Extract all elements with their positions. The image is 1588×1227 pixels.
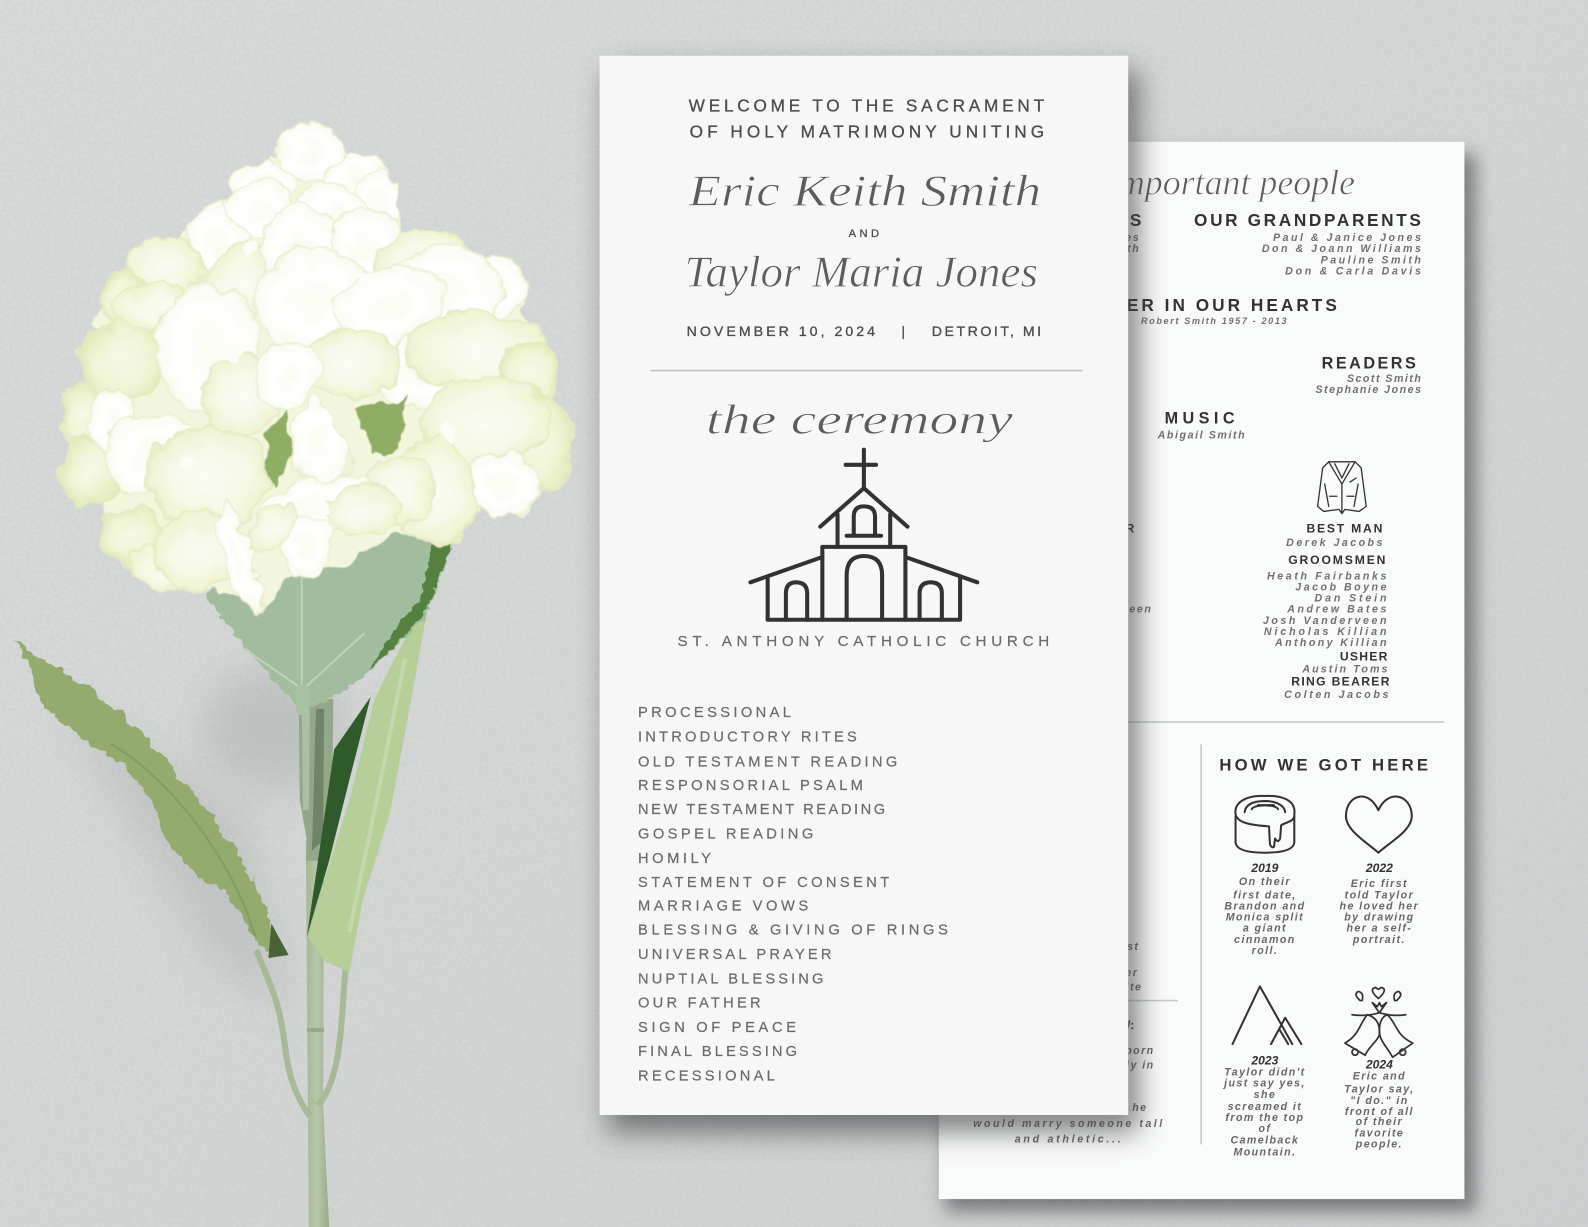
timeline: 2024	[1344, 1057, 1415, 1150]
timeline: 2024: Eric and	[1353, 1071, 1406, 1083]
timeline: 2024: front of all	[1345, 1106, 1414, 1118]
order of ceremony list: GOSPEL READING	[638, 827, 813, 843]
timeline: 2022: he loved her	[1340, 900, 1419, 912]
order of ceremony list: RESPONSORIAL PSALM	[638, 778, 863, 794]
front petals	[238, 400, 398, 577]
timeline: 2022: 2022	[1365, 861, 1393, 875]
icon: heart	[1346, 797, 1412, 853]
section: best man and groomsmen	[1263, 522, 1390, 701]
order of ceremony list: NUPTIAL BLESSING	[638, 971, 823, 987]
script heading: the ceremony: the ceremony	[706, 396, 1013, 443]
heading: important people: Important people	[1106, 162, 1355, 202]
timeline: 2019	[1224, 861, 1305, 957]
date and location: NOVEMBER 10, 2024	[687, 324, 875, 340]
order of ceremony list: SIGN OF PEACE	[638, 1020, 796, 1036]
section: readers: Stephanie Jones	[1316, 384, 1421, 396]
and: AND	[849, 228, 879, 240]
icon: mountains	[1233, 986, 1301, 1044]
order of ceremony list: FINAL BLESSING	[638, 1044, 797, 1060]
story text fragments peeking out from behind the front card: her	[1118, 967, 1138, 979]
story text fragments peeking out from behind the front card: first	[1112, 941, 1139, 953]
timeline: 2022: her a self-	[1346, 923, 1412, 935]
large sage leaf below the bloom	[206, 516, 452, 715]
pale long leaf with dark underside	[307, 597, 429, 972]
timeline: 2019: first date,	[1233, 889, 1297, 901]
story text fragments peeking out from behind the front card: only in	[1110, 1059, 1155, 1071]
date and location	[687, 324, 1041, 340]
section: best man and groomsmen: Colten Jacobs	[1284, 689, 1389, 701]
petals: top cluster	[59, 119, 573, 619]
section: best man and groomsmen: Anthony Killian	[1274, 637, 1387, 649]
section: best man and groomsmen: USHER	[1340, 649, 1388, 663]
panel: back program card	[939, 142, 1464, 1199]
section: our grandparents: OUR GRANDPARENTS	[1194, 210, 1421, 230]
heading: how we got here: HOW WE GOT HERE	[1219, 756, 1428, 775]
timeline: 2024: "I do." in	[1350, 1095, 1409, 1107]
section: music: MUSIC	[1165, 409, 1235, 427]
order of ceremony list: NEW TESTAMENT READING	[638, 802, 885, 818]
timeline: 2023: she	[1254, 1089, 1276, 1101]
section: best man and groomsmen: GROOMSMEN	[1288, 553, 1385, 567]
timeline: 2022: by drawing	[1344, 912, 1415, 924]
section: parents (left column, mostly hidden)	[987, 210, 1144, 255]
lower stem and side twigs	[256, 841, 346, 1227]
timeline: 2023: Camelback	[1230, 1134, 1299, 1146]
section: best man and groomsmen: Andrew Bates	[1286, 604, 1387, 616]
timeline: 2023: Taylor didn't	[1224, 1066, 1306, 1078]
icon: church	[750, 450, 977, 620]
front card shadow	[608, 71, 1138, 1132]
section: bridal party (left column, mostly hidden): Kayla Vanderveen	[1035, 604, 1153, 616]
story text fragments peeking out from behind the front card: DID YOU KNOW:	[1038, 1018, 1134, 1032]
timeline: 2019: Monica split	[1226, 912, 1304, 924]
section: our grandparents: Don & Joann Williams	[1262, 243, 1421, 255]
timeline: 2023: from the top	[1225, 1112, 1304, 1124]
order of ceremony list: OUR FATHER	[638, 996, 761, 1012]
plant shadow on wall	[61, 668, 344, 1013]
section: our grandparents: Pauline Smith	[1321, 254, 1421, 266]
section: forever in our hearts: FOREVER IN OUR HEARTS	[1052, 295, 1340, 315]
section: our grandparents: Don & Carla Davis	[1285, 265, 1421, 277]
panel: front program card	[600, 56, 1128, 1115]
timeline: 2023	[1222, 1053, 1306, 1159]
section: music: Abigail Smith	[1157, 430, 1245, 442]
section: readers	[1316, 355, 1421, 396]
section: forever in our hearts	[1052, 295, 1340, 326]
left serrated leaf	[13, 639, 289, 958]
story text fragments peeking out from behind the front card	[973, 941, 1178, 1145]
order of ceremony list: HOMILY	[638, 851, 711, 867]
section: readers: READERS	[1322, 355, 1416, 373]
order of ceremony list: STATEMENT OF CONSENT	[638, 875, 889, 891]
section: best man and groomsmen: Josh Vanderveen	[1263, 615, 1387, 627]
order of ceremony list: RECESSIONAL	[638, 1069, 775, 1085]
story text fragments peeking out from behind the front card: favorite	[1093, 981, 1142, 993]
hydrangea bloom	[59, 119, 573, 619]
timeline: 2023: just say yes,	[1222, 1078, 1306, 1090]
icon: wedding bells with hearts	[1345, 987, 1413, 1057]
timeline: 2019: Brandon and	[1224, 900, 1305, 912]
section: bridal party (left column, mostly hidden)	[1010, 522, 1153, 616]
order of ceremony list: INTRODUCTORY RITES	[638, 729, 857, 745]
timeline: 2024: Taylor say,	[1344, 1084, 1415, 1096]
section: music	[1157, 409, 1245, 442]
timeline: 2019: a giant	[1243, 923, 1287, 935]
section: best man and groomsmen: BEST MAN	[1306, 522, 1382, 536]
script name: bride: Taylor Maria Jones	[685, 247, 1038, 297]
order of ceremony list: UNIVERSAL PRAYER	[638, 947, 831, 963]
story text fragments peeking out from behind the front card: was born	[1097, 1045, 1155, 1057]
date and location: |	[901, 324, 905, 340]
date and location: DETROIT, MI	[932, 324, 1041, 340]
section: best man and groomsmen: Dan Stein	[1315, 593, 1387, 605]
section: best man and groomsmen: Heath Fairbanks	[1267, 570, 1387, 582]
timeline: 2019: On their	[1239, 876, 1291, 888]
section: best man and groomsmen: Nicholas Killian	[1264, 626, 1387, 638]
section: our grandparents	[1194, 210, 1421, 277]
welcome heading: OF HOLY MATRIMONY UNITING	[690, 122, 1044, 142]
white stamens	[180, 246, 459, 514]
section: best man and groomsmen: Jacob Boyne	[1295, 581, 1387, 593]
welcome heading	[689, 95, 1045, 142]
order of ceremony list	[638, 705, 948, 1085]
timeline: 2022: told Taylor	[1345, 889, 1414, 901]
script name: groom: Eric Keith Smith	[687, 166, 1041, 216]
story text fragments peeking out from behind the front card: said he	[1101, 1102, 1147, 1114]
welcome heading: WELCOME TO THE SACRAMENT	[689, 95, 1045, 115]
timeline: 2024: of their	[1356, 1116, 1403, 1128]
order of ceremony list: OLD TESTAMENT READING	[638, 755, 897, 771]
timeline: 2023: screamed it	[1228, 1101, 1302, 1113]
order of ceremony list: PROCESSIONAL	[638, 705, 791, 721]
section: forever in our hearts: Robert Smith 1957 - 2013	[1141, 316, 1288, 326]
timeline: 2022: Eric first	[1351, 878, 1408, 890]
story text fragments peeking out from behind the front card: would marry someone tall	[973, 1118, 1164, 1130]
story text fragments peeking out from behind the front card: and athletic...	[1015, 1133, 1122, 1145]
timeline: 2019: roll.	[1252, 945, 1278, 957]
section: parents (left column, mostly hidden): Brian & Lee Jones	[1020, 232, 1140, 244]
flower photo: white hydrangea with green leaves and stem	[13, 119, 573, 1227]
bloom silhouette	[71, 127, 567, 608]
petals: right cluster	[373, 338, 462, 407]
section: best man and groomsmen: Derek Jacobs	[1286, 537, 1382, 549]
timeline: 2023: Mountain.	[1233, 1147, 1296, 1159]
timeline: 2023: 2023	[1250, 1053, 1279, 1067]
section: best man and groomsmen: Austin Toms	[1301, 663, 1388, 675]
section: our grandparents: Paul & Janice Jones	[1273, 232, 1421, 244]
timeline: 2019: cinnamon	[1234, 934, 1296, 946]
order of ceremony list: MARRIAGE VOWS	[638, 898, 808, 914]
timeline: 2019: 2019	[1250, 861, 1279, 875]
green gaps in the bloom	[356, 397, 405, 454]
timeline: 2024: people.	[1355, 1138, 1403, 1150]
section: parents (left column, mostly hidden): Ron & Ann Smith	[1029, 243, 1140, 255]
section: parents (left column, mostly hidden): OUR PARENTS	[987, 210, 1144, 230]
timeline: 2023: of	[1258, 1123, 1271, 1135]
icon: cinnamon roll	[1235, 796, 1294, 853]
section: best man and groomsmen: RING BEARER	[1291, 675, 1390, 689]
timeline: 2022: portrait.	[1352, 934, 1406, 946]
petals: left cluster	[131, 238, 204, 299]
timeline: 2024: 2024	[1365, 1057, 1393, 1071]
section: bridal party (left column, mostly hidden): MAID OF HONOR	[1010, 522, 1136, 536]
timeline: 2024: favorite	[1355, 1127, 1404, 1139]
timeline: 2022	[1340, 861, 1419, 946]
upper double stem	[299, 699, 333, 861]
church name: ST. ANTHONY CATHOLIC CHURCH	[678, 633, 1049, 650]
order of ceremony list: BLESSING & GIVING OF RINGS	[638, 923, 948, 939]
back program card shadow	[945, 154, 1476, 1211]
petals: centre	[299, 328, 400, 397]
icon: suit jacket	[1318, 462, 1366, 513]
section: readers: Scott Smith	[1347, 373, 1421, 385]
